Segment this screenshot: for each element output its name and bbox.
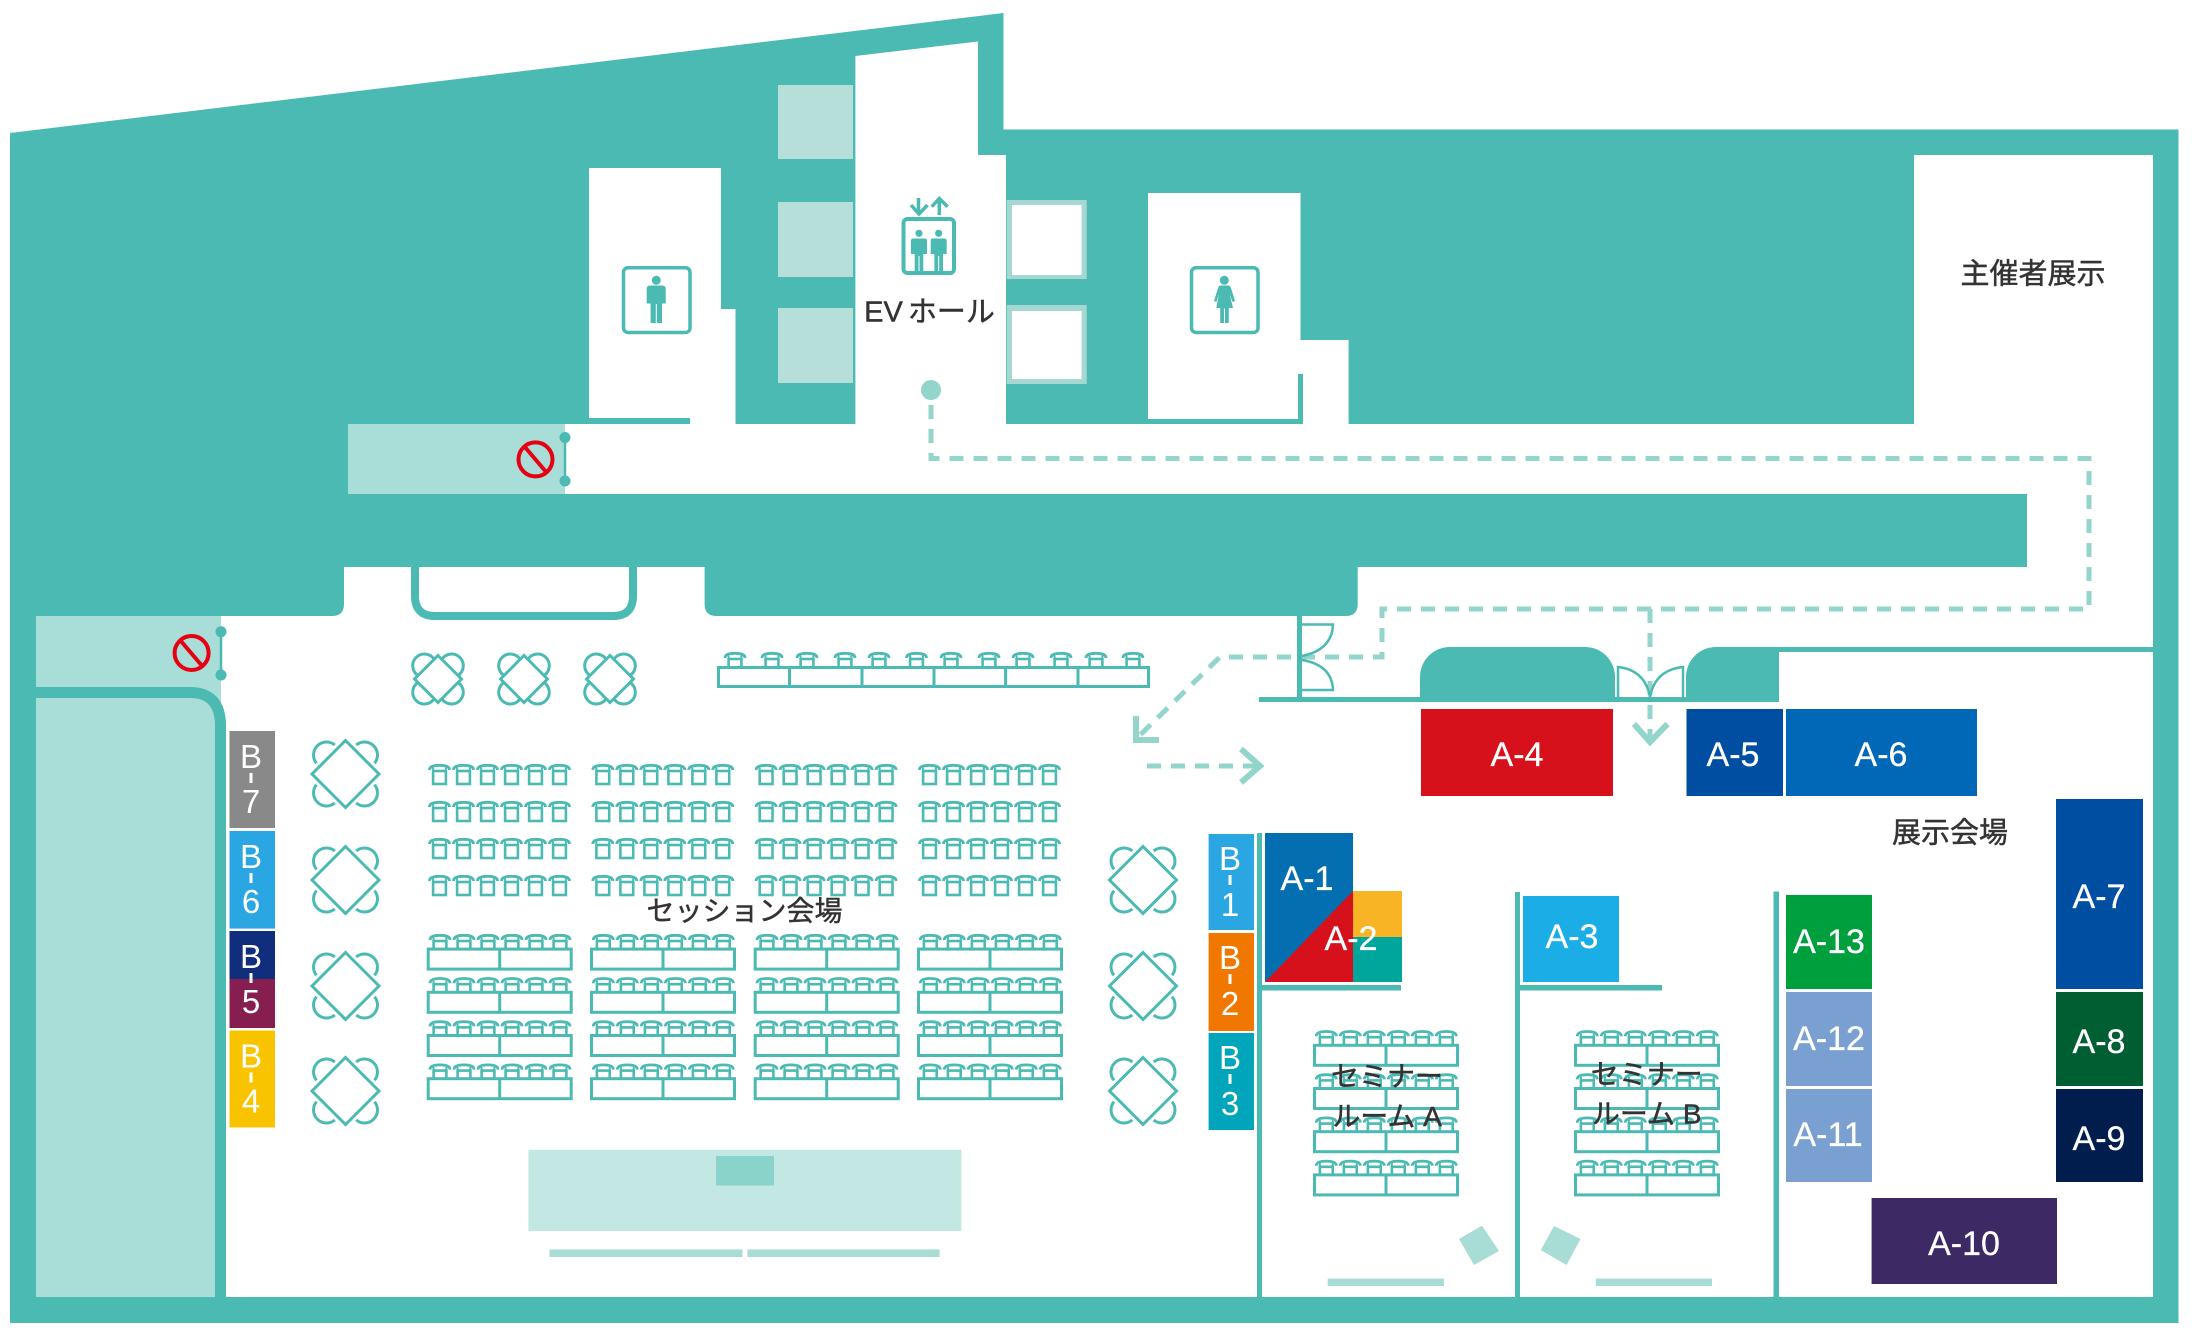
stage — [528, 1150, 961, 1231]
booth B-1: 1 — [1221, 886, 1239, 923]
booth B-5: B — [240, 938, 262, 975]
booth A-6: A-6 — [1855, 736, 1907, 774]
seminar room B — [1541, 1032, 1718, 1286]
hall route — [1147, 764, 1258, 768]
booth A-11 — [1786, 1089, 1872, 1182]
booth B-5: 5 — [242, 983, 260, 1020]
booth B-5 — [230, 931, 275, 1028]
no-entry sign upper — [518, 432, 570, 486]
booths A-1 and A-2 — [1265, 833, 1402, 982]
booth A-13: A-13 — [1793, 923, 1865, 961]
panel: upper corridor — [565, 424, 2153, 494]
booth B-7: B — [240, 738, 262, 775]
top banquet tables — [718, 653, 1148, 687]
booth A-7: A-7 — [2073, 878, 2125, 916]
booth A-9: A-9 — [2073, 1120, 2125, 1158]
room walls — [1257, 833, 1779, 1297]
booth A-13 — [1786, 895, 1872, 989]
booth B-3: 3 — [1221, 1085, 1239, 1122]
booth A-7 — [2056, 799, 2143, 989]
left wall block — [10, 566, 344, 616]
booth B-1 — [1209, 834, 1254, 930]
main route — [931, 405, 2089, 735]
label: session venue: セッション会場 — [646, 896, 843, 926]
arrow head down — [1634, 724, 1668, 742]
slanted lectern A — [1459, 1226, 1499, 1265]
label: exhibition venue: 展示会場 — [1892, 816, 2008, 850]
label: seminar room A: ルーム A — [1332, 1100, 1442, 1132]
booth B-4 — [230, 1030, 275, 1128]
icon: women's restroom — [1192, 268, 1258, 332]
booth B-6: B — [240, 838, 262, 875]
booth A-10 — [1872, 1198, 2057, 1284]
booth A-12 — [1786, 992, 1872, 1086]
booth B-1: B — [1219, 840, 1241, 877]
booth A-9 — [2056, 1089, 2143, 1182]
route arrows dashed — [921, 380, 2089, 782]
centre wall block — [705, 566, 1358, 616]
label: seminar room B: ルーム B — [1592, 1098, 1702, 1129]
small round tables — [413, 654, 635, 704]
podium — [716, 1156, 774, 1186]
icon: men's restroom — [624, 268, 690, 332]
panel: EV hall floor — [855, 42, 1006, 424]
panel: organizer exhibit area — [1914, 155, 2153, 646]
label: organizer exhibit: 主催者展示 — [1960, 258, 2106, 290]
session theater seating — [430, 765, 1060, 895]
booth A-12: A-12 — [1793, 1020, 1865, 1058]
booth A-5: A-5 — [1707, 736, 1759, 774]
panel: men's restroom floor — [589, 168, 736, 424]
booth A-4: A-4 — [1491, 736, 1543, 774]
booth A-8 — [2056, 992, 2143, 1086]
booth A-8: A-8 — [2073, 1023, 2125, 1061]
booth A-4 — [1421, 709, 1613, 796]
booth A-11: A-11 — [1793, 1116, 1863, 1154]
label: seminar room A: セミナー — [1331, 1060, 1443, 1092]
round tables left — [312, 740, 379, 1124]
booth B-4: 4 — [242, 1082, 260, 1120]
restricted side area — [36, 616, 221, 1297]
booth B-7: 7 — [242, 783, 260, 820]
round tables right — [1110, 846, 1176, 1124]
booth B-2: 2 — [1221, 985, 1239, 1022]
central wall band — [10, 494, 2027, 567]
session classroom seating — [428, 935, 1062, 1099]
no-entry sign lower — [175, 626, 226, 680]
label: EV hall: EV ホール — [864, 296, 995, 328]
booth B-2 — [1209, 933, 1254, 1031]
bench A — [1328, 1279, 1444, 1286]
light utility shafts — [778, 85, 1087, 384]
panel: women's restroom floor — [1148, 193, 1349, 424]
booth B-6: 6 — [242, 883, 260, 920]
branch route — [1648, 609, 1652, 740]
slanted lectern B — [1541, 1226, 1580, 1265]
U-shaped alcove wall — [415, 566, 633, 616]
booth B-3: B — [1219, 1039, 1241, 1076]
restricted corridor area — [348, 424, 565, 494]
label: seminar room B: セミナー — [1591, 1058, 1703, 1090]
arrow head right — [1241, 749, 1260, 782]
booths A-1 and A-2: A-2 — [1325, 920, 1377, 958]
bench B — [1596, 1279, 1712, 1286]
panel: main hall floor — [221, 566, 2153, 1297]
stage front benches — [550, 1249, 940, 1257]
exhibition hall entrance walls and doors — [1259, 616, 2153, 702]
restroom wall strips — [589, 374, 1303, 424]
booth A-10: A-10 — [1928, 1225, 2000, 1263]
booth A-5 — [1686, 709, 1783, 796]
booths A-1 and A-2: A-1 — [1281, 860, 1333, 898]
start dot — [921, 380, 941, 400]
side area curved wall — [36, 692, 220, 1297]
booth B-3 — [1209, 1033, 1254, 1130]
booth A-3: A-3 — [1546, 918, 1598, 956]
booth B-4: B — [240, 1038, 262, 1074]
booths B column right — [1209, 834, 1254, 1130]
icon: elevator — [904, 198, 954, 273]
booth B-6 — [230, 831, 275, 929]
booths B column left — [230, 731, 275, 1128]
seminar room A — [1314, 1032, 1499, 1286]
booth B-7 — [230, 731, 275, 828]
booth A-6 — [1786, 709, 1977, 796]
booth B-2: B — [1219, 939, 1241, 976]
arrow head down-left — [1136, 716, 1159, 740]
booth A-3 — [1523, 896, 1619, 982]
